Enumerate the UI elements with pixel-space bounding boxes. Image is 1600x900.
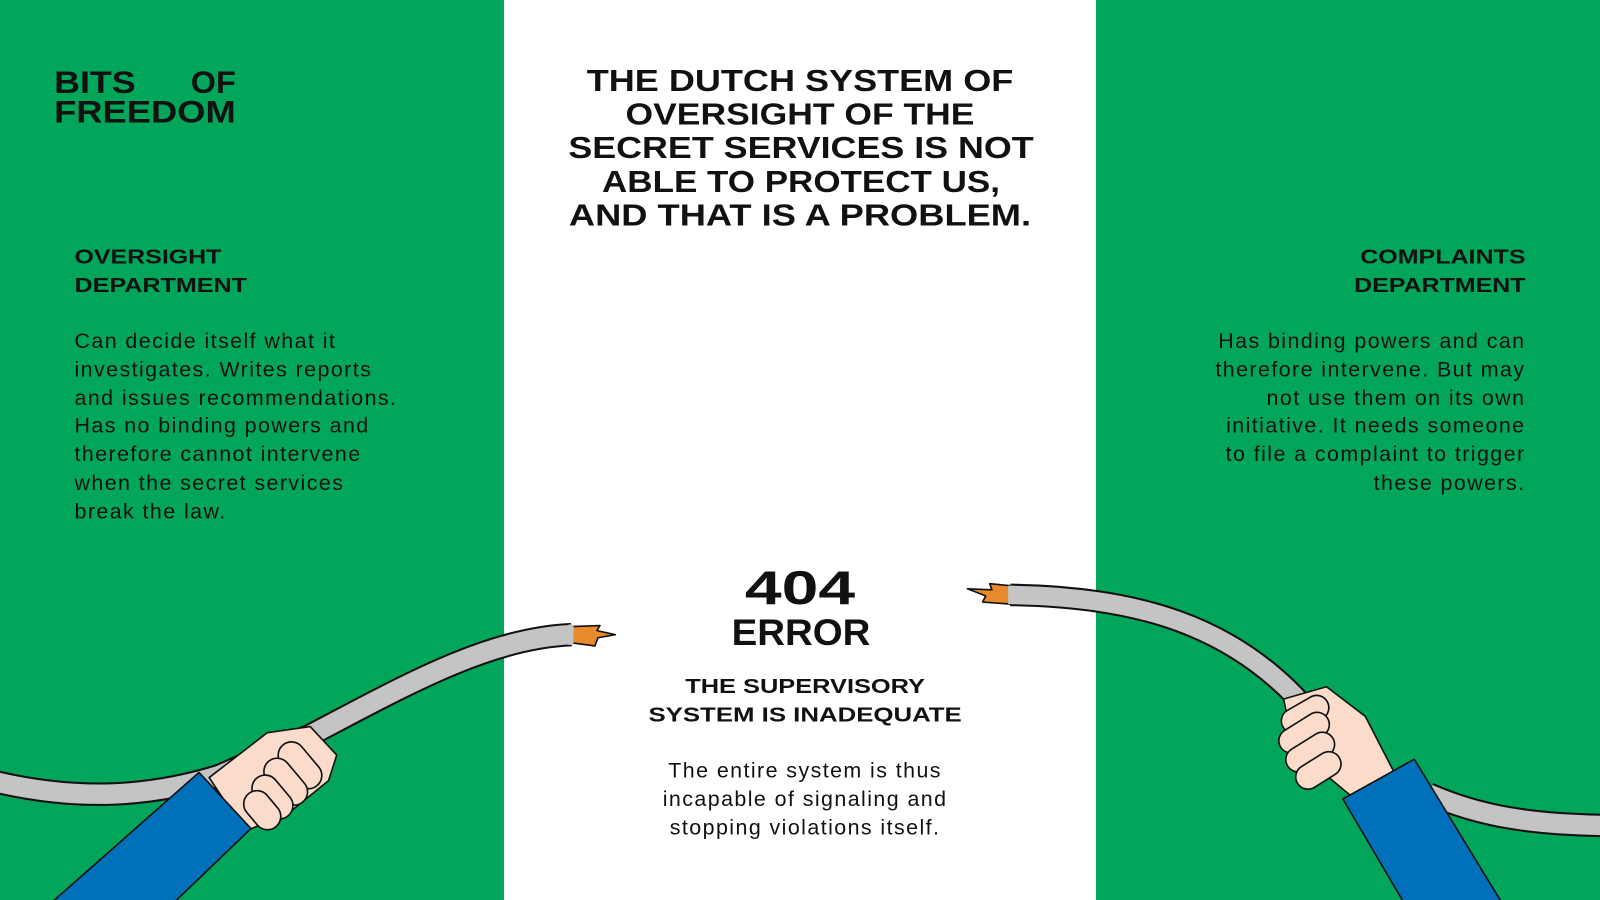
text: conclusion: stopping violations itself.: [670, 816, 940, 840]
heading: complaints department: COMPLAINTS: [1360, 246, 1526, 268]
404 error: 404: [745, 562, 855, 614]
illustration: left hand holding cable: [0, 624, 615, 900]
title: THE DUTCH SYSTEM OF: [587, 64, 1013, 98]
logo: OF: [191, 64, 236, 100]
text: oversight description: investigates. Writes reports: [74, 358, 372, 382]
text: conclusion: [663, 759, 947, 840]
404 error: ERROR: [732, 612, 870, 653]
panel: right green: [1096, 0, 1600, 900]
text: complaints description: these powers.: [1374, 471, 1526, 495]
text: complaints description: therefore intervene. But may: [1215, 358, 1526, 382]
text: oversight description: therefore cannot intervene: [74, 442, 362, 466]
title: [568, 64, 1034, 233]
heading: oversight department: [74, 246, 248, 297]
title: AND THAT IS A PROBLEM.: [569, 199, 1031, 233]
404 error: [732, 562, 870, 653]
panel: left green: [0, 0, 504, 900]
heading: oversight department: DEPARTMENT: [74, 275, 248, 297]
logo: BITS: [54, 64, 136, 100]
text: complaints description: not use them on its own: [1267, 386, 1526, 410]
text: complaints description: initiative. It needs someone: [1226, 414, 1526, 438]
heading: complaints department: DEPARTMENT: [1354, 275, 1526, 297]
illustration: right hand holding cable: [967, 584, 1600, 900]
text: complaints description: Has binding powers and can: [1218, 329, 1526, 353]
title: ABLE TO PROTECT US,: [602, 165, 1000, 199]
subheading: supervisory system: [648, 676, 962, 726]
title: SECRET SERVICES IS NOT: [568, 131, 1034, 165]
logo: [54, 64, 236, 129]
text: oversight description: break the law.: [74, 499, 227, 523]
text: conclusion: incapable of signaling and: [663, 787, 947, 811]
logo: FREEDOM: [54, 93, 236, 129]
heading: complaints department: [1354, 246, 1526, 297]
text: oversight description: [73, 329, 397, 523]
text: complaints description: to file a complaint to trigger: [1226, 442, 1526, 466]
subheading: supervisory system: THE SUPERVISORY: [685, 676, 925, 698]
text: conclusion: The entire system is thus: [668, 759, 942, 783]
subheading: supervisory system: SYSTEM IS INADEQUATE: [648, 704, 962, 726]
text: oversight description: when the secret services: [73, 471, 344, 495]
text: oversight description: Can decide itself what it: [74, 329, 336, 353]
text: oversight description: Has no binding powers and: [74, 414, 370, 438]
text: oversight description: and issues recommendations.: [74, 386, 397, 410]
heading: oversight department: OVERSIGHT: [74, 246, 222, 268]
title: OVERSIGHT OF THE: [626, 97, 974, 131]
text: complaints description: [1215, 329, 1526, 495]
